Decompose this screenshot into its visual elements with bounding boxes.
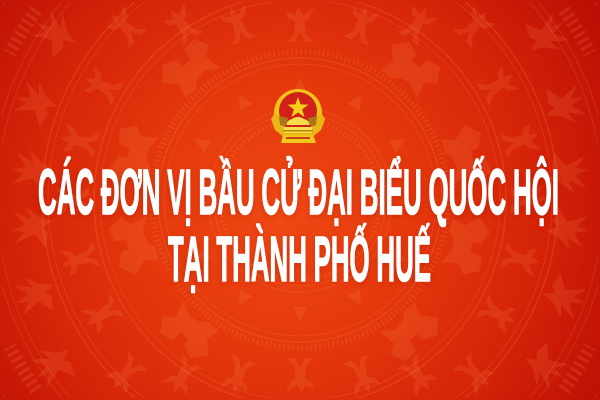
title xyxy=(38,155,559,295)
icon: gear and rice xyxy=(284,117,312,133)
icon: national emblem xyxy=(271,89,325,143)
icon: star xyxy=(288,97,308,117)
icon: ribbon xyxy=(281,135,316,143)
title shadow xyxy=(37,157,560,297)
